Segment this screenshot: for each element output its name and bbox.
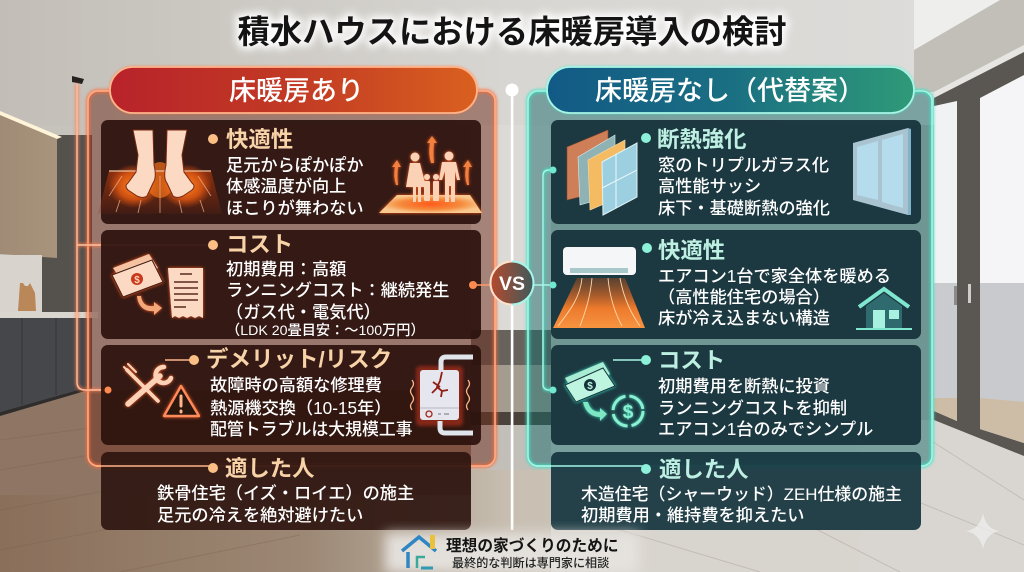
- heading: suitable people: 適した人: [225, 456, 315, 481]
- card: insulation: [550, 120, 921, 224]
- panel: with floor heating: [77, 67, 495, 530]
- line to bullet: [96, 465, 213, 467]
- connector line: [77, 84, 213, 390]
- bullet: [208, 463, 218, 473]
- bullet: [641, 464, 651, 474]
- text: insulation: 窓のトリプルガラス化: [658, 155, 829, 175]
- text: cost: [658, 376, 873, 439]
- text: suitable people: 初期費用・維持費を抑えたい: [581, 505, 804, 525]
- icon: money and cycle: $: [623, 402, 634, 423]
- connector to VS: [534, 282, 556, 288]
- heading: cost: コスト: [658, 348, 725, 373]
- footer: [385, 533, 639, 572]
- heading: cost: コスト: [226, 232, 293, 257]
- icon: broken boiler: [410, 357, 473, 433]
- text: suitable people: [581, 485, 902, 525]
- bullet: [642, 243, 652, 253]
- text: comfort: 床が冷え込まない構造: [658, 308, 830, 328]
- footer heading: 理想の家づくりのために: [446, 537, 619, 555]
- sparkle mark: [966, 513, 999, 549]
- text: risk: 熱源機交換（10-15年）: [210, 398, 391, 418]
- connector line: [543, 170, 553, 390]
- card: cost: [550, 345, 921, 445]
- VS badge: [490, 262, 534, 304]
- icon: tools and warning: [124, 364, 199, 416]
- VS badge: VS: [499, 273, 525, 295]
- title: 積水ハウスにおける床暖房導入の検討: [237, 14, 787, 50]
- bullet line: [613, 355, 651, 365]
- icon: house: [856, 289, 912, 329]
- title: 積水ハウスにおける床暖房導入の検討: [237, 14, 787, 50]
- line to bullet: [536, 465, 646, 467]
- card: risk: [101, 345, 481, 445]
- window wall: [914, 0, 1024, 456]
- bullet: [641, 133, 651, 143]
- kitchen cabinets: [0, 76, 98, 416]
- card: comfort: [534, 230, 921, 339]
- bullet: [208, 134, 218, 144]
- icon: warm feet: [98, 130, 222, 214]
- card: suitable people: [536, 452, 921, 530]
- text: cost: （ガス代・電気代）: [226, 302, 381, 322]
- text: insulation: [658, 155, 830, 218]
- text: cost: ランニングコストを抑制: [658, 398, 847, 418]
- text: cost: [226, 259, 449, 339]
- heading pill: 床暖房あり: [229, 76, 364, 106]
- text: comfort: 足元からぽかぽか: [226, 155, 364, 175]
- heading pill: [547, 67, 914, 113]
- panel frame: [88, 91, 495, 466]
- text: comfort: [226, 155, 364, 218]
- card: comfort: [98, 120, 482, 224]
- text: suitable people: 足元の冷えを絶対避けたい: [157, 505, 363, 525]
- bullet: [208, 240, 218, 250]
- text: risk: 配管トラブルは大規模工事: [210, 419, 413, 439]
- icon: money and cycle: $: [587, 381, 593, 392]
- icon: family on heated floor: [379, 136, 482, 213]
- text: risk: 故障時の高額な修理費: [210, 375, 382, 395]
- text: suitable people: [157, 483, 414, 525]
- text: insulation: 床下・基礎断熱の強化: [658, 198, 830, 218]
- text: cost: 初期費用を断熱に投資: [658, 376, 830, 396]
- heading: comfort: 快適性: [658, 238, 725, 263]
- icon: window: [853, 128, 911, 215]
- connector dot to VS: [469, 281, 491, 289]
- bullet line: [165, 355, 199, 365]
- heading: comfort: 快適性: [226, 127, 293, 152]
- connector dot: [104, 386, 112, 394]
- text: comfort: エアコン1台で家全体を暖める: [658, 266, 891, 286]
- text: suitable people: 鉄骨住宅（イズ・ロイエ）の施主: [157, 483, 414, 503]
- heading: suitable people: 適した人: [659, 457, 749, 482]
- icon: money and bill: [112, 254, 203, 318]
- card: cost: [101, 230, 491, 339]
- text: comfort: [658, 266, 891, 328]
- connector dot: [550, 386, 556, 394]
- text: suitable people: 木造住宅（シャーウッド）ZEH仕様の施主: [581, 485, 902, 504]
- text: cost: （LDK 20畳目安：～100万円）: [226, 323, 425, 339]
- text: cost: 初期費用：高額: [226, 259, 346, 279]
- icon: insulation layers: [567, 130, 637, 215]
- icon: money and cycle: [565, 362, 643, 426]
- text: comfort: ほこりが舞わない: [226, 198, 364, 218]
- heading pill: [110, 67, 477, 113]
- text: comfort: 体感温度が向上: [226, 176, 346, 196]
- icon: air conditioner: [553, 247, 645, 328]
- center divider line: [506, 84, 518, 530]
- heading: risk: デメリット/リスク: [206, 346, 392, 372]
- heading pill: 床暖房なし（代替案）: [595, 76, 865, 106]
- icon: money and bill: $: [134, 275, 140, 286]
- icon: house logo: [402, 535, 436, 568]
- text: comfort: （高性能住宅の場合）: [658, 287, 830, 307]
- panel: without floor heating: [528, 67, 932, 530]
- card: suitable people: [96, 452, 471, 530]
- text: cost: ランニングコスト：継続発生: [226, 280, 449, 300]
- text: insulation: 高性能サッシ: [658, 176, 761, 196]
- footer note: 最終的な判断は専門家に相談: [452, 555, 609, 570]
- heading: insulation: 断熱強化: [657, 127, 747, 152]
- panel frame: [528, 91, 932, 466]
- connector dot: [550, 166, 556, 174]
- text: cost: エアコン1台のみでシンプル: [658, 419, 873, 439]
- text: risk: [210, 375, 413, 439]
